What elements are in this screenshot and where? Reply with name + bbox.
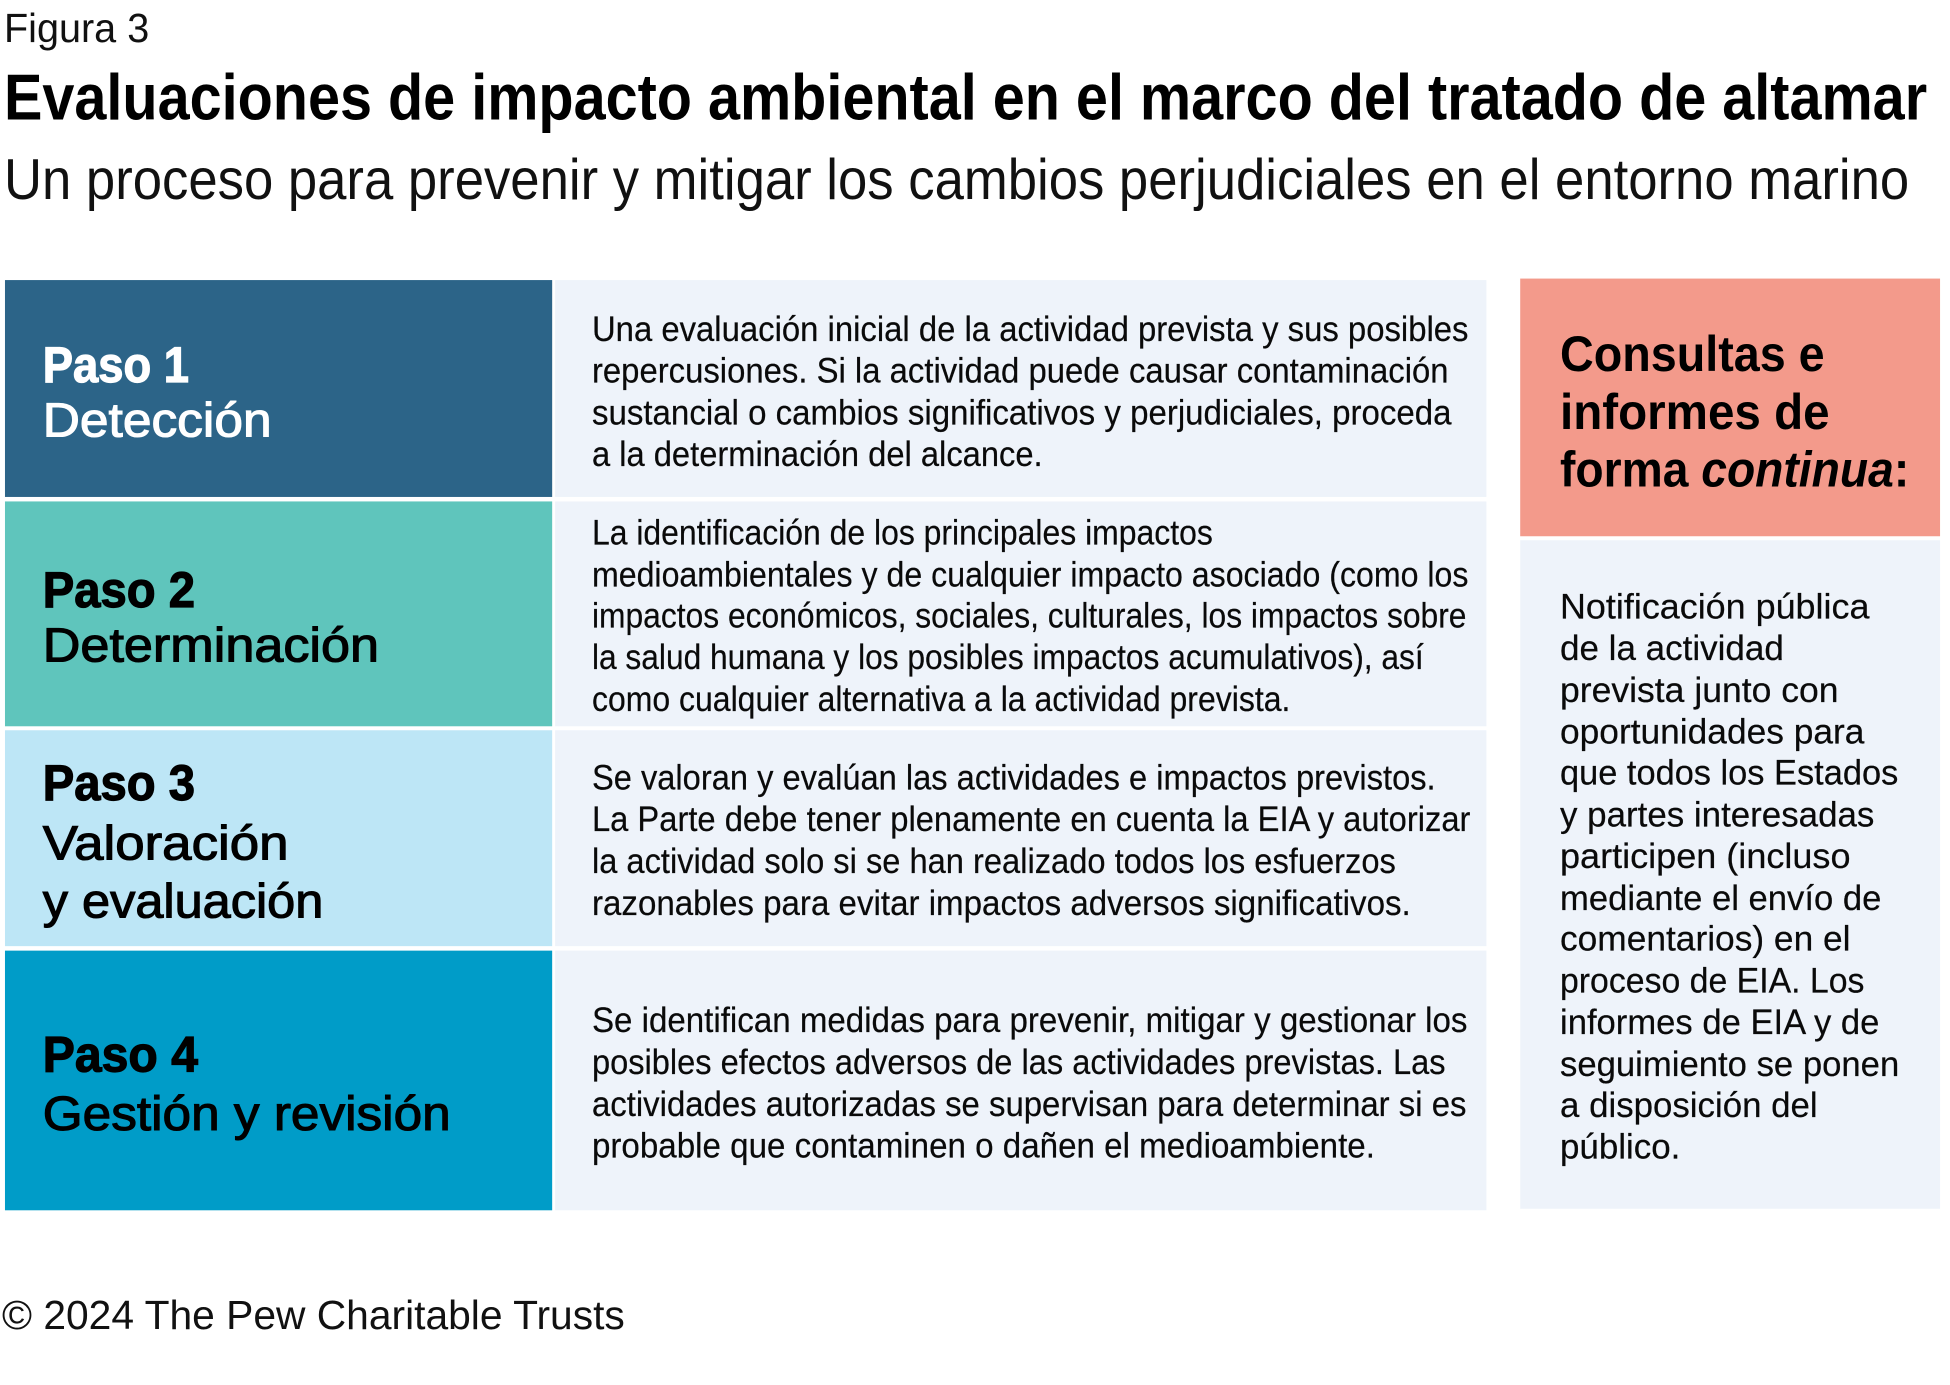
panel: step 1 xyxy=(5,280,1486,497)
consultation body text: Notificación pública xyxy=(1560,587,1870,626)
consultation body text: comentarios) en el xyxy=(1560,920,1851,959)
step 2 heading: Paso 2 xyxy=(43,562,195,618)
consultation heading: informes de xyxy=(1560,384,1830,440)
panel: step 2 xyxy=(5,501,1486,726)
step 4 heading xyxy=(43,1027,451,1141)
step 3 description: la actividad solo si se han realizado todos los esfuerzos xyxy=(592,842,1396,881)
step 3 description: Se valoran y evalúan las actividades e impactos previstos. xyxy=(592,758,1436,797)
step 2 description: La identificación de los principales impactos xyxy=(592,514,1213,553)
consultation body text: proceso de EIA. Los xyxy=(1560,961,1864,1000)
consultation body text: público. xyxy=(1560,1128,1680,1167)
step 2 description: impactos económicos, sociales, culturales, los impactos sobre xyxy=(592,596,1466,635)
step 3 description: razonables para evitar impactos adversos significativos. xyxy=(592,884,1411,923)
step 1 description xyxy=(592,310,1468,474)
step 1 heading xyxy=(43,337,272,448)
consultation body text: a disposición del xyxy=(1560,1086,1818,1125)
step 2 heading xyxy=(43,562,379,673)
step 1 description: sustancial o cambios significativos y perjudiciales, proceda xyxy=(592,393,1452,432)
step 4 description: Se identifican medidas para prevenir, mitigar y gestionar los xyxy=(592,1001,1467,1040)
step 4 description: actividades autorizadas se supervisan para determinar si es xyxy=(592,1085,1466,1124)
step 4 heading: Gestión y revisión xyxy=(43,1088,451,1141)
step 2 description: la salud humana y los posibles impactos acumulativos), así xyxy=(592,638,1424,677)
copyright footer: © 2024 The Pew Charitable Trusts xyxy=(2,1292,625,1338)
step 4 description: posibles efectos adversos de las actividades previstas. Las xyxy=(592,1043,1446,1082)
step 1 heading: Detección xyxy=(43,395,272,448)
panel: step 3 xyxy=(5,730,1486,946)
step 1 heading: Paso 1 xyxy=(43,337,189,393)
consultation body text: seguimiento se ponen xyxy=(1560,1045,1899,1084)
step 3 heading: Paso 3 xyxy=(43,755,195,811)
consultation body text: oportunidades para xyxy=(1560,713,1865,752)
step 3 description xyxy=(592,758,1471,923)
step 4 description: probable que contaminen o dañen el medioambiente. xyxy=(592,1127,1375,1166)
figure label: Figura 3 xyxy=(4,5,149,51)
consultation body text: participen (incluso xyxy=(1560,837,1851,876)
step 3 heading: Valoración xyxy=(43,818,289,871)
panel: step 4 xyxy=(5,951,1486,1210)
consultation heading: Consultas e xyxy=(1560,326,1825,382)
step 1 description: repercusiones. Si la actividad puede causar contaminación xyxy=(592,352,1449,391)
step 2 description: medioambientales y de cualquier impacto asociado (como los xyxy=(592,555,1468,594)
step 3 description: La Parte debe tener plenamente en cuenta la EIA y autorizar xyxy=(592,800,1471,839)
step 1 description: Una evaluación inicial de la actividad prevista y sus posibles xyxy=(592,310,1468,349)
consultation heading: forma continua: xyxy=(1560,442,1909,498)
consultation body text: que todos los Estados xyxy=(1560,753,1898,792)
consultation heading xyxy=(1560,326,1909,498)
step 4 heading: Paso 4 xyxy=(43,1027,198,1083)
consultation body text: informes de EIA y de xyxy=(1560,1003,1879,1042)
panel: continuous consultation xyxy=(1520,279,1940,1209)
step 2 description xyxy=(592,514,1468,719)
consultation body text: prevista junto con xyxy=(1560,671,1839,710)
consultation body text: mediante el envío de xyxy=(1560,879,1881,918)
step 2 heading: Determinación xyxy=(43,620,379,673)
step 4 description xyxy=(592,1001,1467,1166)
step 2 description: como cualquier alternativa a la actividad prevista. xyxy=(592,680,1290,719)
consultation body text: de la actividad xyxy=(1560,629,1784,668)
step 1 description: a la determinación del alcance. xyxy=(592,435,1043,474)
consultation body text: y partes interesadas xyxy=(1560,795,1874,834)
step 3 heading xyxy=(43,755,323,928)
consultation body text xyxy=(1560,587,1899,1167)
step 3 heading: y evaluación xyxy=(43,875,323,928)
